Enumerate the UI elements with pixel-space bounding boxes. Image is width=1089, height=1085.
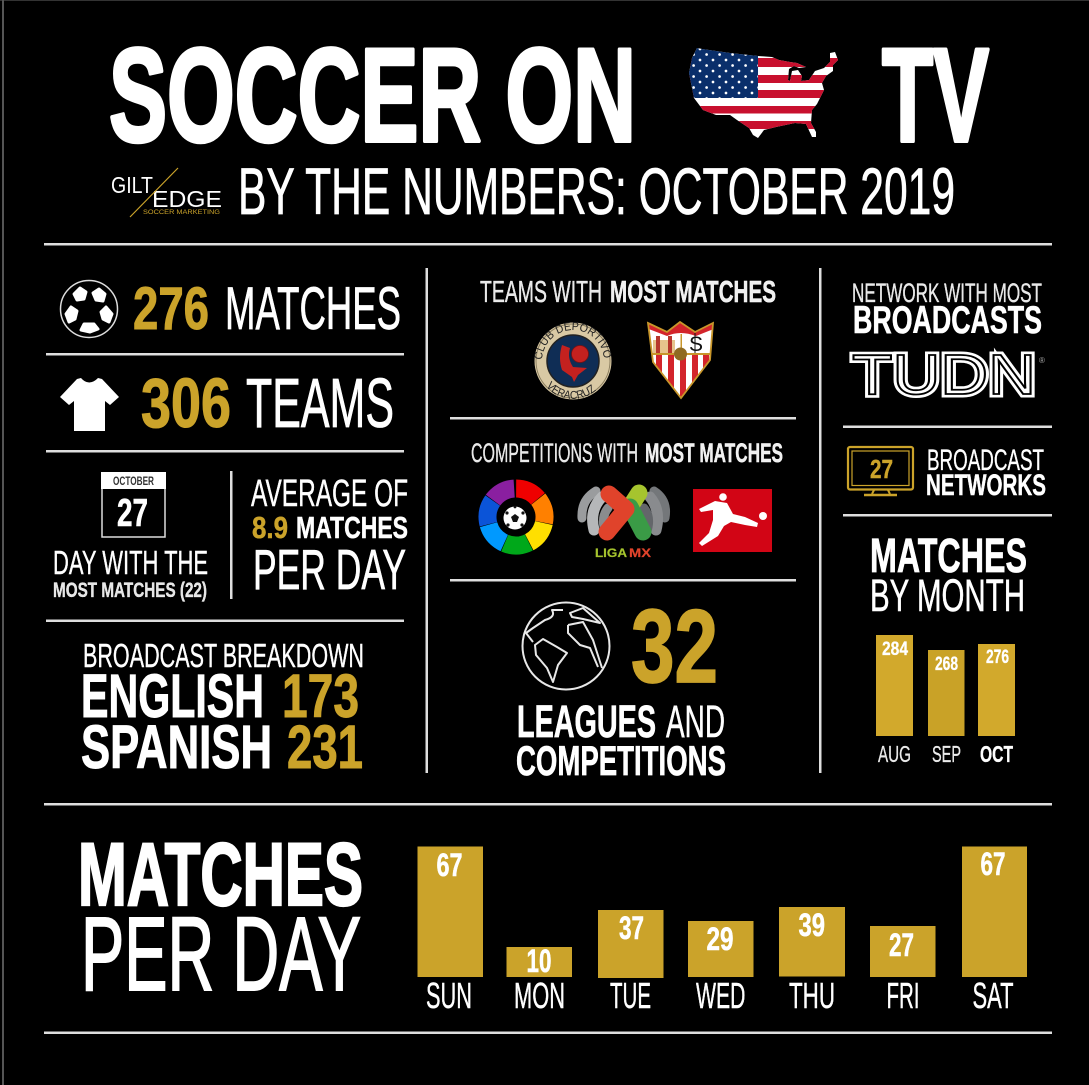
bar chart: matches by month: SEP xyxy=(932,741,961,767)
bar chart: matches per day xyxy=(418,846,1027,1016)
bar chart: matches per day: MON xyxy=(514,975,565,1016)
icon: calendar: 27 xyxy=(117,492,148,535)
heading: competitions with most matches: COMPETITIONS WITH xyxy=(471,438,638,468)
heading: matches by month xyxy=(870,530,1027,621)
broadcast breakdown: 173 xyxy=(282,662,359,730)
icon: television xyxy=(848,447,913,495)
stat: average per day xyxy=(251,473,408,602)
heading: matches per day: MATCHES xyxy=(78,824,363,924)
icon: USA flag map xyxy=(689,48,838,138)
bar chart: matches per day: 37 xyxy=(619,910,644,946)
panel: right column xyxy=(843,278,1052,767)
icon: Veracruz crest xyxy=(534,322,612,400)
bar chart: matches per day: 27 xyxy=(889,927,914,963)
stat: day with most matches xyxy=(53,472,208,602)
title: SOCCER ON xyxy=(109,22,636,170)
stat: 276 matches: MATCHES xyxy=(225,275,401,342)
logo: Gilt Edge xyxy=(111,168,222,217)
logo: Gilt Edge: EDGE xyxy=(152,186,222,212)
bar chart: matches per day: 29 xyxy=(706,921,734,957)
panel: left stats xyxy=(46,275,408,781)
heading: competitions with most matches: MOST MATCHES xyxy=(645,438,783,468)
bar chart: matches by month: 276 xyxy=(986,647,1009,668)
stat: 32 leagues and competitions: COMPETITIONS xyxy=(516,737,726,784)
logo: TUDN: ® xyxy=(1039,356,1045,365)
stat: average per day: PER DAY xyxy=(253,538,406,602)
logo: TUDN: TUDN xyxy=(852,343,1036,407)
title xyxy=(110,46,990,144)
icon: globe xyxy=(522,602,610,690)
stat: 32 leagues and competitions: LEAGUES xyxy=(517,696,656,747)
heading: network with most broadcasts xyxy=(852,278,1042,342)
stat: 32 leagues and competitions: AND xyxy=(666,696,725,747)
icon: calendar: OCTOBER xyxy=(113,476,154,488)
icon: Veracruz crest: VERACRUZ xyxy=(548,380,596,399)
icon: Liga MX logo: LIGA xyxy=(595,546,627,560)
stat: day with most matches: DAY WITH THE xyxy=(53,544,208,581)
stat: 32 leagues and competitions xyxy=(516,589,726,784)
panel: middle column xyxy=(450,274,796,784)
stat: day with most matches: MOST MATCHES (22) xyxy=(53,578,207,602)
broadcast breakdown: ENGLISH xyxy=(81,662,264,730)
bar chart: matches per day: WED xyxy=(696,975,746,1016)
stat: 276 matches: 276 xyxy=(133,275,209,342)
bar chart: matches by month: OCT xyxy=(980,741,1013,767)
stat: 306 teams xyxy=(60,364,394,442)
bar chart: matches per day: 67 xyxy=(980,846,1006,882)
bar chart: matches per day: FRI xyxy=(886,975,920,1016)
logo: TUDN: TUDN xyxy=(852,343,1036,407)
broadcast breakdown: BROADCAST BREAKDOWN xyxy=(83,637,364,674)
bar chart: matches per day: SUN xyxy=(426,975,472,1016)
icon: calendar xyxy=(101,472,166,537)
broadcast breakdown: SPANISH xyxy=(81,713,272,781)
stat: average per day: AVERAGE OF xyxy=(251,473,408,515)
icon: Sevilla crest xyxy=(646,320,716,400)
bar chart: matches per day: SAT xyxy=(972,975,1014,1016)
heading: teams with most matches xyxy=(480,274,776,309)
bar chart: matches per day: 67 xyxy=(436,847,462,883)
icon: shirt xyxy=(60,378,119,431)
bar chart: matches per day: TUE xyxy=(610,975,651,1016)
stat: 27 broadcast networks xyxy=(848,444,1046,502)
stat: 306 teams: TEAMS xyxy=(246,364,394,442)
icon: Veracruz crest: CLUB DEPORTIVO xyxy=(534,322,612,359)
broadcast breakdown xyxy=(81,637,364,781)
icon: Liga MX logo xyxy=(582,491,666,560)
bar chart: matches by month: AUG xyxy=(878,741,911,767)
bar chart: matches per day: THU xyxy=(789,975,835,1016)
bar chart: matches per day: 10 xyxy=(526,943,552,979)
title: TV xyxy=(882,22,989,170)
heading: matches per day xyxy=(78,824,363,1013)
icon: Sevilla crest: S xyxy=(689,333,703,356)
icon: soccer ball xyxy=(60,280,118,338)
stat: average per day: 8.9 xyxy=(252,510,288,545)
logo: Gilt Edge: SOCCER MARKETING xyxy=(143,210,220,216)
icon: La Liga logo xyxy=(476,477,556,557)
icon: Bundesliga logo xyxy=(693,489,772,552)
heading: matches per day: PER DAY xyxy=(81,896,361,1013)
stat: 27 broadcast networks: 27 xyxy=(870,454,893,484)
icon: Liga MX logo: MX xyxy=(629,546,651,560)
stat: 32 leagues and competitions: 32 xyxy=(631,589,718,705)
heading: teams with most matches: TEAMS WITH xyxy=(480,274,602,309)
broadcast breakdown: 231 xyxy=(287,713,363,781)
bar chart: matches per day: 39 xyxy=(798,907,825,943)
bar chart: matches by month xyxy=(876,635,1015,767)
bar chart: matches by month: 284 xyxy=(882,639,908,660)
stat: 276 matches xyxy=(60,275,401,342)
stat: 306 teams: 306 xyxy=(141,364,231,442)
stat: average per day: MATCHES xyxy=(296,510,408,545)
logo: Gilt Edge: GILT xyxy=(111,172,153,198)
heading: teams with most matches: MOST MATCHES xyxy=(610,274,776,309)
bar chart: matches by month: 268 xyxy=(935,654,958,675)
